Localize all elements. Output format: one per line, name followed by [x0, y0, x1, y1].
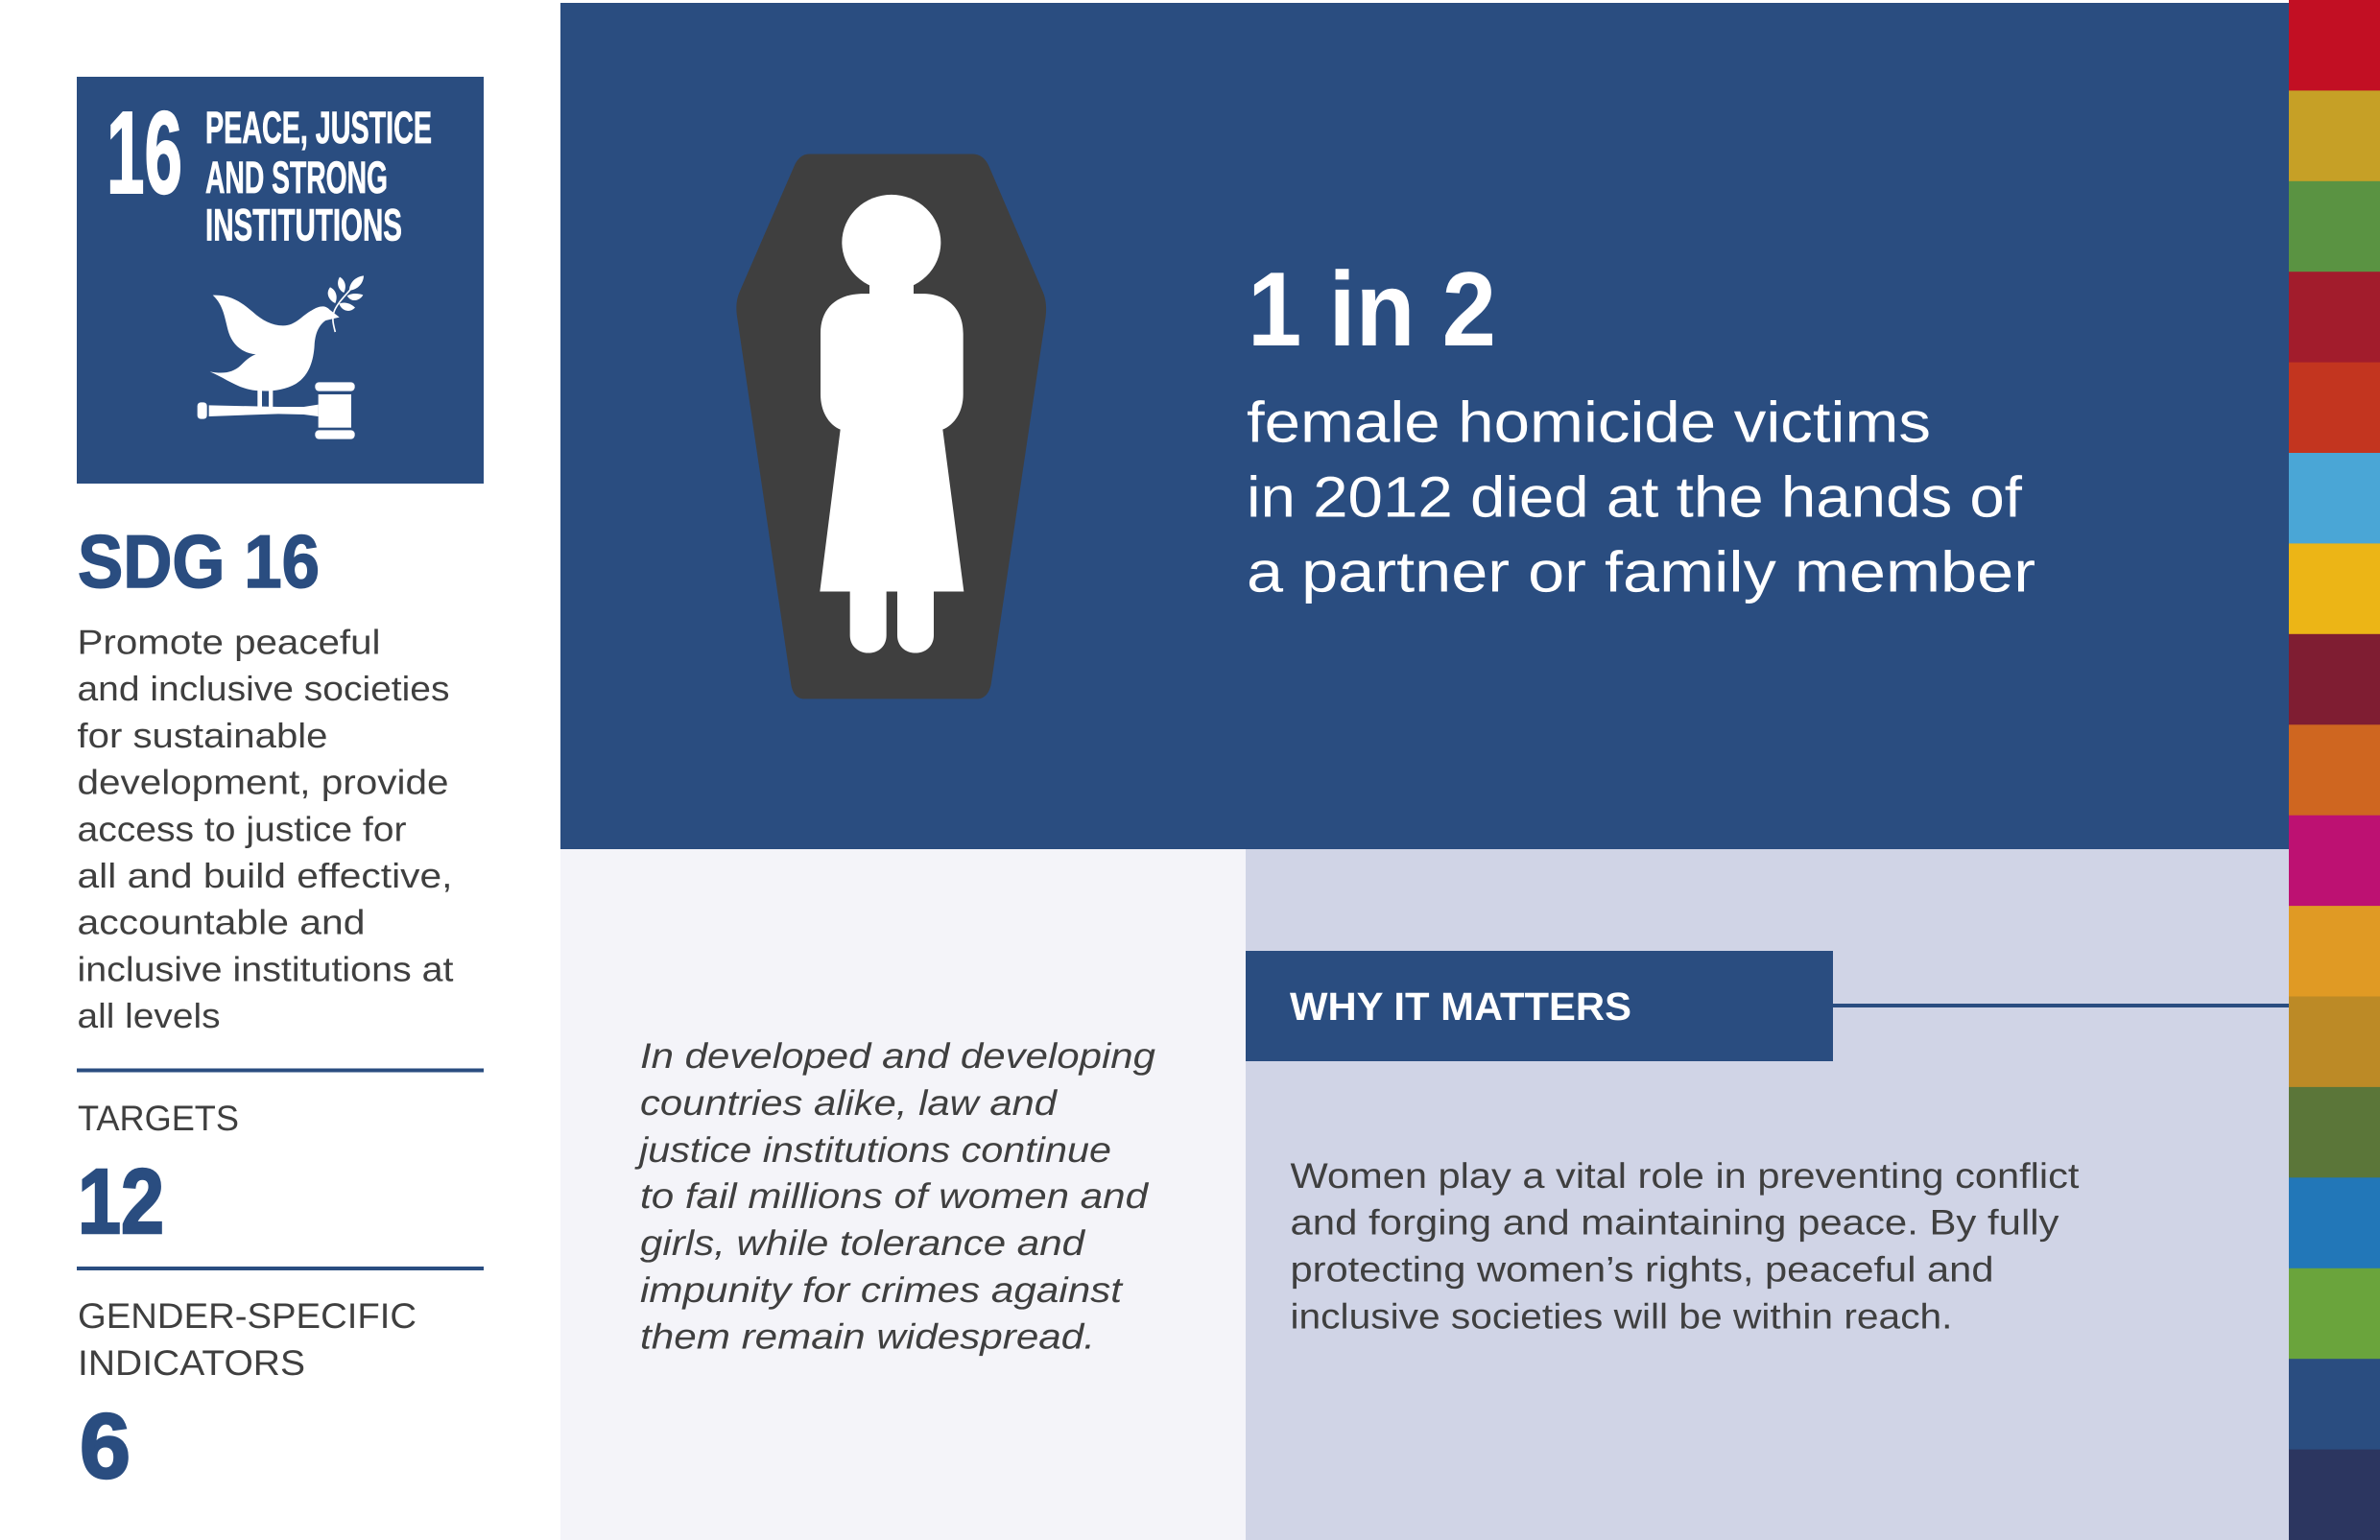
stat: gender-specific indicators — [78, 1296, 416, 1498]
text block: SDG 16 goal description: for sustainable — [77, 716, 328, 755]
tile title: INSTITUTIONS — [205, 200, 402, 249]
italic statement text — [633, 1036, 1155, 1357]
text block: SDG 16 goal description: Promote peaceful — [77, 622, 380, 662]
panel: why it matters — [1246, 849, 2289, 1540]
text block: SDG 16 goal description: access to justice for — [77, 809, 407, 848]
why it matters body text: inclusive societies will be within reach. — [1290, 1296, 1952, 1336]
text block: SDG 16 goal description: accountable and — [77, 903, 365, 942]
text block: SDG 16 goal description — [77, 622, 453, 1035]
text block: SDG 16 goal description: and inclusive societies — [77, 669, 449, 708]
why it matters heading bar — [1246, 951, 1833, 1061]
targets label: TARGETS — [78, 1099, 239, 1138]
why it matters body text: Women play a vital role in preventing conflict — [1290, 1156, 2080, 1196]
panel: SDG 16 tile — [77, 77, 484, 484]
headline description: in 2012 died at the hands of — [1247, 464, 2022, 530]
italic statement text: countries alike, law and — [640, 1083, 1059, 1123]
targets number: 12 — [78, 1150, 164, 1253]
tile title — [205, 102, 432, 249]
italic statement text: them remain widespread. — [640, 1316, 1095, 1357]
headline description: a partner or family member — [1247, 539, 2035, 604]
heading: SDG 16: SDG 16 — [78, 519, 320, 604]
tile title: AND STRONG — [205, 152, 388, 202]
icon: woman in coffin — [736, 154, 1046, 699]
italic statement text: to fail millions of women and — [640, 1176, 1150, 1216]
why it matters body text: protecting women’s rights, peaceful and — [1290, 1250, 1994, 1290]
headline figure: 1 in 2 — [1248, 250, 1496, 368]
italic statement text: In developed and developing — [640, 1036, 1155, 1076]
text block: SDG 16 goal description: all and build effective, — [77, 856, 452, 895]
tile number: 16 — [107, 87, 182, 218]
panel: context statement — [560, 849, 1246, 1540]
indicators label: INDICATORS — [78, 1343, 305, 1383]
icon: dove on gavel — [198, 275, 364, 439]
headline description: female homicide victims — [1247, 391, 1931, 455]
why it matters heading bar: WHY IT MATTERS — [1290, 984, 1631, 1029]
text block: SDG 16 goal description: all levels — [77, 996, 221, 1035]
why it matters body text: and forging and maintaining peace. By fully — [1290, 1203, 2059, 1243]
text block: SDG 16 goal description: development, provide — [77, 763, 449, 802]
tile title: PEACE, JUSTICE — [205, 102, 432, 153]
italic statement text: justice institutions continue — [633, 1130, 1111, 1170]
indicators label: GENDER-SPECIFIC — [78, 1296, 416, 1336]
indicators number: 6 — [80, 1395, 131, 1498]
text block: SDG 16 goal description: inclusive institutions at — [77, 949, 453, 988]
why it matters body text — [1290, 1156, 2080, 1336]
stat: targets — [78, 1099, 239, 1253]
indicators label — [78, 1296, 416, 1383]
italic statement text: girls, while tolerance and — [640, 1223, 1086, 1263]
panel: headline statistic banner — [560, 3, 2289, 849]
headline description — [1247, 391, 2035, 604]
colour strip: SDG colours — [2289, 0, 2380, 1540]
italic statement text: impunity for crimes against — [640, 1270, 1124, 1310]
